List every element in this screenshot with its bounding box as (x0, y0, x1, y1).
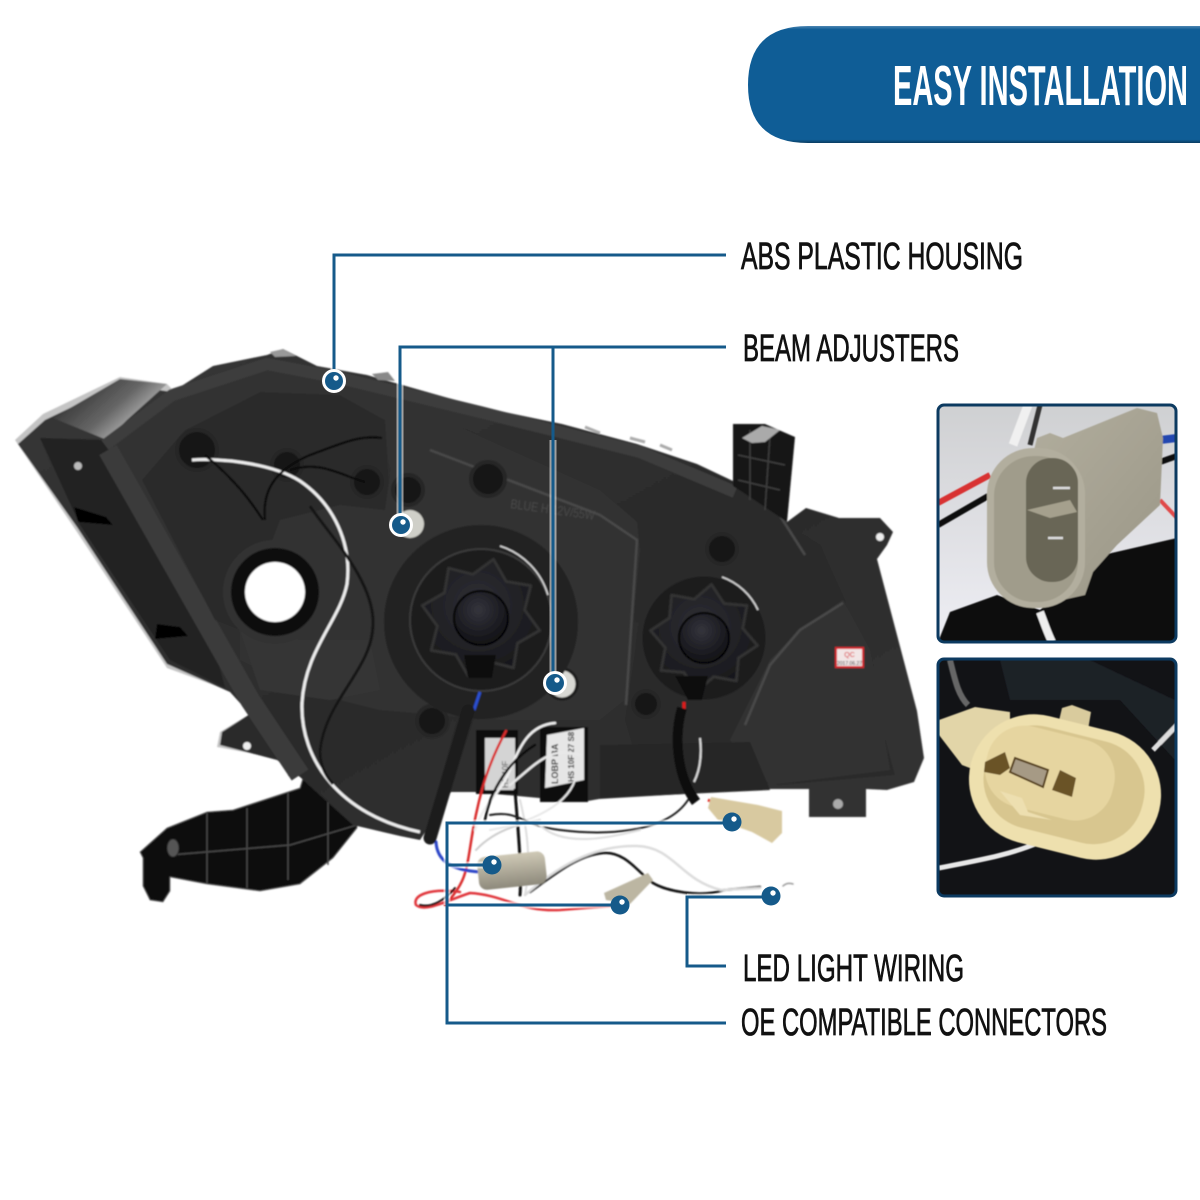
lower mounting bracket (140, 765, 358, 902)
left recess panel (142, 392, 390, 690)
bracket ribs (170, 773, 357, 888)
control modules: HS 10F (501, 761, 510, 788)
white wire harness (192, 460, 420, 832)
badge: easy installation (748, 26, 1200, 143)
socket: top connector (708, 797, 782, 843)
main bulb cover (384, 525, 578, 719)
white wire behind sleeve (694, 738, 701, 782)
connector opening (1026, 458, 1078, 582)
headlamp rear photo illustration (15, 349, 924, 910)
adjuster port (223, 540, 327, 644)
QC sticker (836, 648, 863, 667)
upper clip bracket (733, 424, 795, 522)
callout markers (324, 370, 780, 914)
adjuster screws (396, 510, 424, 538)
bracket clip metal (742, 426, 780, 443)
bottom clip (833, 799, 843, 809)
callout: LED light wiring (687, 897, 964, 990)
lower dark band (600, 742, 770, 798)
secondary bulb cover (641, 575, 767, 701)
bracket hole (167, 839, 179, 857)
connector pins (1048, 488, 1070, 538)
socket: wedge connector (604, 873, 653, 904)
connector tab (1058, 705, 1091, 730)
callout leader halos (334, 360, 770, 905)
control modules: HS 10F 27 S8 (567, 731, 576, 782)
right raised panel (625, 500, 895, 785)
clear lens piece (53, 379, 167, 440)
terminal slots (984, 752, 1010, 775)
raised lower left shade (240, 630, 380, 700)
secondary wire sleeve (678, 708, 696, 802)
connector inner wall (994, 456, 1078, 602)
control modules (476, 727, 588, 802)
connector floor (986, 726, 1115, 820)
wires (938, 475, 990, 503)
background wires (950, 660, 968, 705)
control modules: LOBP BA (550, 743, 560, 784)
loose wires (415, 800, 793, 910)
main wire sleeve (430, 711, 468, 838)
connector rim (968, 713, 1162, 860)
connector recess (983, 725, 1145, 844)
screw points (69, 457, 87, 475)
backdrop shade (1000, 660, 1175, 760)
module wiring (445, 723, 580, 905)
QC sticker: QC (844, 652, 855, 659)
QC sticker: 2017.06.27 (837, 661, 862, 667)
molded text: BLUE H 12V/55W (510, 496, 596, 523)
label: LED LIGHT WIRING (743, 948, 964, 990)
callout: OE compatible connectors (447, 823, 1107, 1044)
lens edge (15, 377, 300, 777)
outer rim (105, 364, 735, 492)
central raised panel (240, 425, 640, 720)
panel: cream connector close-up (938, 659, 1177, 896)
connector body (940, 706, 1011, 769)
connector tab (1027, 500, 1077, 518)
black backdrop (938, 538, 1177, 642)
blue feed wire (474, 692, 480, 710)
socket: middle connector (476, 851, 547, 891)
panel: grey connector close-up (938, 405, 1177, 642)
callout: beam adjusters (400, 328, 959, 683)
connector face rim (987, 448, 1085, 608)
connector body (1034, 408, 1164, 600)
thin black wires (205, 437, 382, 520)
housing body (18, 349, 924, 840)
key slots (1000, 791, 1052, 820)
rubber nubs (177, 430, 737, 736)
label: BEAM ADJUSTERS (743, 328, 959, 370)
side clips (74, 507, 113, 525)
left lens shadow (40, 438, 225, 688)
black wire harness (310, 506, 373, 784)
label: ABS PLASTIC HOUSING (741, 236, 1023, 278)
callout: ABS plastic housing (334, 236, 1023, 381)
lower right raised panel (730, 600, 890, 785)
top edge clips (270, 349, 296, 357)
red feed wire (684, 702, 718, 804)
panel highlight (430, 450, 843, 725)
